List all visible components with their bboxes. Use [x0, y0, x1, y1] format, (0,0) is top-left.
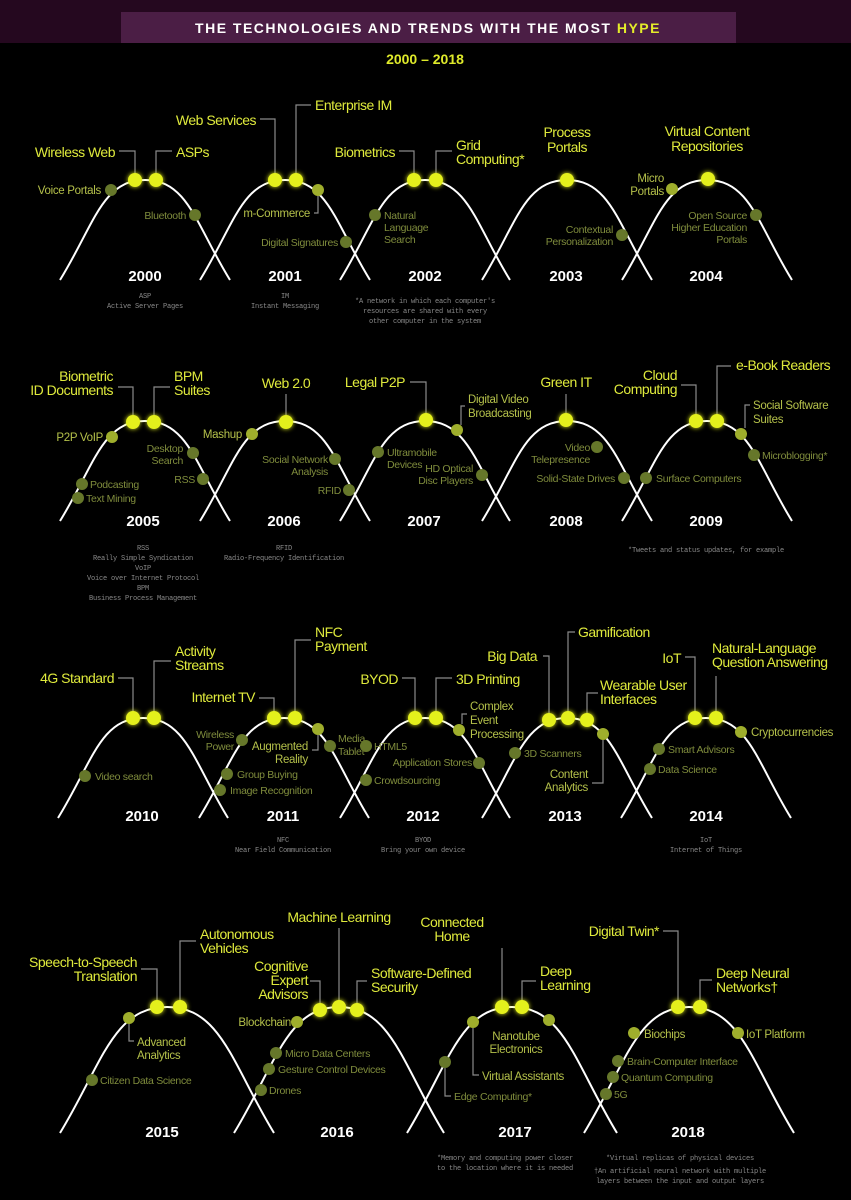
curve 2007: Ultramobile [387, 447, 437, 459]
curve 2001: IM [281, 293, 289, 301]
curve 2008: Telepresence [531, 454, 590, 466]
curve 2005: Search [152, 455, 183, 467]
curve 2010: Streams [175, 657, 224, 673]
curve 2012: 2012 [406, 808, 440, 825]
curve 2005: BPM [137, 585, 149, 593]
curve 2012: HTML5 [374, 741, 407, 753]
curve 2012: BYOD [415, 837, 431, 845]
curve 2007: Devices [387, 459, 422, 471]
curve 2016 [234, 909, 471, 1141]
curve 2011: Image Recognition [230, 785, 313, 797]
curve 2002: Biometrics [335, 144, 395, 160]
curve 2000: Wireless Web [35, 144, 116, 160]
curve 2000: ASP [139, 293, 151, 301]
curve 2002: other computer in the system [369, 318, 481, 326]
curve 2002: *A network in which each computer's [355, 298, 495, 306]
curve 2012: Event [470, 715, 499, 727]
curve 2016: Advisors [258, 986, 308, 1002]
curve 2014: IoT [662, 650, 682, 666]
curve 2011: Power [206, 741, 235, 753]
curve 2002: Computing* [456, 151, 525, 167]
curve 2015: 2015 [145, 1124, 179, 1141]
curve 2008: Solid-State Drives [536, 473, 615, 485]
curve 2017: Virtual Assistants [482, 1071, 565, 1083]
curve 2014: Cryptocurrencies [751, 727, 834, 739]
curve 2011: NFC [315, 624, 342, 640]
title banner [0, 0, 851, 43]
subtitle: years: 2000 – 2018 [386, 51, 464, 67]
curve 2007: Broadcasting [468, 408, 532, 420]
curve 2005: Biometric [59, 368, 113, 384]
curve 2015: Autonomous [200, 926, 274, 942]
curve 2018: Networks† [716, 979, 778, 995]
curve 2004: Portals [630, 186, 665, 198]
curve 2013 [482, 624, 687, 825]
curve 2010: Activity [175, 643, 215, 659]
curve 2004: Portals [716, 234, 747, 246]
curve 2014: Natural-Language [712, 640, 816, 656]
curve 2012: Complex [470, 701, 513, 713]
curve 2010: 2010 [125, 808, 159, 825]
curve 2002 [335, 137, 525, 326]
curve 2010 [40, 643, 228, 825]
curve 2013: Analytics [545, 782, 589, 794]
curve 2006 [200, 375, 370, 563]
curve 2001: m-Commerce [243, 208, 310, 220]
curve 2004: Micro [637, 173, 664, 185]
curve 2011: Reality [275, 754, 309, 766]
curve 2018: Digital Twin* [589, 923, 660, 939]
curve 2006: Social Network [262, 454, 328, 466]
curve 2011 [191, 624, 369, 855]
curve 2007: HD Optical [425, 463, 473, 475]
curve 2003: Personalization [546, 236, 613, 248]
curve 2018 [584, 923, 805, 1186]
curve 2012: Bring your own device [381, 847, 465, 855]
curve 2009: Suites [753, 414, 784, 426]
curve 2003 [482, 124, 652, 285]
curve 2014: IoT [700, 837, 712, 845]
curve 2014: Data Science [658, 764, 717, 776]
curve 2006: Radio-Frequency Identification [224, 555, 344, 563]
curve 2004: 2004 [689, 268, 723, 285]
curve 2005: Podcasting [90, 479, 139, 491]
curve 2011: Augmented [252, 741, 308, 753]
curve 2015 [29, 926, 274, 1141]
curve 2005: VoIP [135, 565, 151, 573]
curve 2005: RSS [137, 545, 149, 553]
curve 2013: Gamification [578, 624, 650, 640]
curve 2017: Edge Computing* [454, 1091, 532, 1103]
curve 2018: *Virtual replicas of physical devices [606, 1155, 754, 1163]
curve 2017: Deep [540, 963, 571, 979]
curve 2006: Analysis [291, 466, 328, 478]
curve 2002: resources are shared with every [363, 308, 487, 316]
curve 2012: Application Stores [393, 757, 472, 769]
curve 2007: 2007 [407, 513, 441, 530]
curve 2005: ID Documents [30, 382, 113, 398]
curve 2017: Connected [420, 914, 484, 930]
curve 2009: Social Software [753, 400, 828, 412]
curve 2009: *Tweets and status updates, for example [628, 547, 784, 555]
curve 2001: Digital Signatures [261, 237, 338, 249]
curve 2009: Cloud [643, 367, 677, 383]
curve 2009: 2009 [689, 513, 723, 530]
curve 2018: Deep Neural [716, 965, 789, 981]
curve 2001 [176, 97, 392, 311]
curve 2002: Search [384, 234, 416, 246]
curve 2009 [614, 357, 831, 555]
curve 2014: 2014 [689, 808, 723, 825]
curve 2005: RSS [174, 474, 195, 486]
curve 2011: Near Field Communication [235, 847, 331, 855]
curve 2003: 2003 [549, 268, 583, 285]
curve 2016: Security [371, 979, 418, 995]
curve 2002: Natural [384, 210, 416, 222]
curve 2013: Big Data [487, 648, 538, 664]
curve 2015: Speech-to-Speech [29, 954, 137, 970]
curve 2017: Learning [540, 977, 590, 993]
curve 2015: Advanced [137, 1037, 186, 1049]
curve 2005: Desktop [147, 443, 183, 455]
curve 2002: Language [384, 222, 429, 234]
curve 2004: Higher Education [671, 222, 747, 234]
curve 2016: Gesture Control Devices [278, 1064, 386, 1076]
curve 2011: Tablet [338, 746, 365, 758]
curve 2017 [407, 914, 617, 1173]
curve 2003: Contextual [566, 224, 613, 236]
curve 2000 [35, 144, 230, 311]
curve 2005: P2P VoIP [56, 432, 104, 444]
curve 2013: Interfaces [600, 691, 657, 707]
curve 2010: 4G Standard [40, 670, 114, 686]
curve 2016: Micro Data Centers [285, 1048, 370, 1060]
curve 2012: 3D Printing [456, 671, 520, 687]
curve 2017: Electronics [490, 1044, 543, 1056]
curve 2004: Repositories [671, 138, 743, 154]
curve 2016: Machine Learning [287, 909, 391, 925]
curve 2014: Question Answering [712, 654, 828, 670]
curve 2001: 2001 [268, 268, 302, 285]
curve 2000: ASPs [176, 144, 210, 160]
curve 2009: Computing [614, 381, 677, 397]
curve 2000: Voice Portals [38, 185, 102, 197]
curve 2006: 2006 [267, 513, 301, 530]
curve 2010: Video search [95, 771, 153, 783]
title banner: THE TECHNOLOGIES AND TRENDS WITH THE MOST HYPE [195, 20, 661, 36]
curve 2015: Analytics [137, 1050, 181, 1062]
curve 2005: Text Mining [86, 493, 136, 505]
curve 2004 [622, 123, 792, 285]
curve 2008: 2008 [549, 513, 583, 530]
curve 2005: Voice over Internet Protocol [87, 575, 199, 583]
curve 2007: Disc Players [418, 475, 473, 487]
curve 2012: Crowdsourcing [374, 775, 441, 787]
curve 2017: Nanotube [492, 1031, 540, 1043]
curve 2018: †An artificial neural network with multiple [594, 1168, 766, 1176]
curve 2001: Enterprise IM [315, 97, 392, 113]
curve 2018: Biochips [644, 1029, 686, 1041]
curve 2006: Web 2.0 [262, 375, 311, 391]
curve 2014 [621, 640, 834, 855]
curve 2005: Suites [174, 382, 210, 398]
curve 2012 [340, 671, 524, 855]
curve 2003: Process [543, 124, 591, 140]
curve 2017: *Memory and computing power closer [437, 1155, 573, 1163]
curve 2013: Wearable User [600, 677, 687, 693]
curve 2011: Group Buying [237, 769, 298, 781]
curve 2011: 2011 [267, 808, 299, 825]
curve 2000: Active Server Pages [107, 303, 183, 311]
curve 2005: Business Process Management [89, 595, 197, 603]
curve 2018: 2018 [671, 1124, 705, 1141]
curve 2009: Surface Computers [656, 473, 741, 485]
curve 2014: Internet of Things [670, 847, 742, 855]
curve 2016: Software-Defined [371, 965, 471, 981]
curve 2008 [482, 374, 652, 530]
curve 2011: Media [338, 733, 365, 745]
curve 2006: RFID [318, 485, 342, 497]
curve 2009: e-Book Readers [736, 357, 831, 373]
curve 2000: 2000 [128, 268, 162, 285]
curve 2006: Mashup [203, 429, 242, 441]
curve 2008: Green IT [540, 374, 593, 390]
curve 2018: IoT Platform [746, 1029, 805, 1041]
curve 2004: Virtual Content [665, 123, 749, 139]
curve 2015: Vehicles [200, 940, 249, 956]
curve 2013: 2013 [548, 808, 582, 825]
curve 2001: Instant Messaging [251, 303, 319, 311]
curve 2016: Drones [269, 1085, 301, 1097]
curve 2015: Citizen Data Science [100, 1075, 192, 1087]
curve 2012: BYOD [360, 671, 398, 687]
curve 2015: Translation [74, 968, 137, 984]
curve 2003: Portals [547, 139, 588, 155]
curve 2009: Microblogging* [762, 450, 827, 462]
curve 2018: layers between the input and output layers [596, 1178, 764, 1186]
curve 2012: Processing [470, 729, 524, 741]
curve 2016: 2016 [320, 1124, 354, 1141]
curve 2011: Payment [315, 638, 367, 654]
curve 2016: Expert [271, 972, 309, 988]
curve 2007: Legal P2P [345, 374, 405, 390]
curve 2017: Home [434, 928, 470, 944]
curve 2013: 3D Scanners [524, 748, 581, 760]
curve 2006: RFID [276, 545, 292, 553]
curve 2001: Web Services [176, 112, 256, 128]
curve 2007: Digital Video [468, 394, 528, 406]
curve 2018: 5G [614, 1089, 628, 1101]
curve 2016: Cognitive [254, 958, 308, 974]
curve 2005 [30, 368, 230, 603]
curve 2017: 2017 [498, 1124, 532, 1141]
curve 2011: Internet TV [191, 689, 256, 705]
curve 2011: Wireless [196, 729, 234, 741]
curve 2011: NFC [277, 837, 289, 845]
curve 2013: Content [550, 769, 588, 781]
curve 2002: Grid [456, 137, 480, 153]
curve 2014: Smart Advisors [668, 744, 734, 756]
curve 2018: Quantum Computing [621, 1072, 713, 1084]
curve 2017: to the location where it is needed [437, 1165, 573, 1173]
curve 2018: Brain-Computer Interface [627, 1056, 738, 1068]
curve 2005: 2005 [126, 513, 160, 530]
curve 2005: Really Simple Syndication [93, 555, 193, 563]
curve 2004: Open Source [688, 210, 747, 222]
curve 2008: Video [565, 442, 590, 454]
curve 2007 [340, 374, 532, 530]
curve 2000: Bluetooth [144, 210, 186, 222]
curve 2005: BPM [174, 368, 203, 384]
curve 2016: Blockchain [238, 1017, 291, 1029]
curve 2002: 2002 [408, 268, 442, 285]
